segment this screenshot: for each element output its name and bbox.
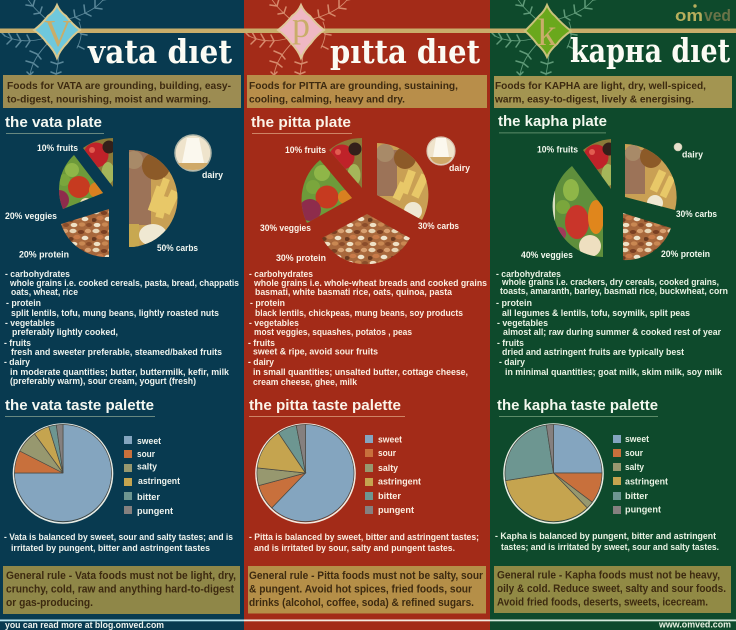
food list: kapha: toasts, amaranth, barley, basmati rice, buckwheat, corn	[500, 286, 728, 296]
legend: kapha tastes: pungent	[625, 504, 661, 514]
labels: pitta plate	[260, 145, 470, 263]
note: kapha balance	[495, 531, 719, 552]
banner: pitta foods intro	[247, 75, 487, 108]
pie: vata plate veggies	[59, 155, 103, 209]
legend: kapha tastes: bitter	[625, 491, 649, 501]
labels: pitta plate: 30% carbs	[418, 221, 459, 231]
food list: vata: - carbohydrates	[5, 269, 70, 279]
legend: pitta tastes: sour	[378, 448, 397, 458]
pie: kapha plate carbs	[625, 142, 679, 212]
panel: vata diet	[0, 0, 244, 630]
food list: kapha: - protein	[496, 298, 532, 308]
legend: kapha tastes: astringent	[625, 476, 668, 486]
pie chart: vata tastes	[14, 424, 112, 523]
footer: website: www.omved.com	[658, 620, 731, 630]
food list: pitta	[248, 269, 487, 387]
labels: pitta plate: dairy	[449, 163, 470, 173]
note: pitta balance: and is irritated by sour, salty and pungent tastes.	[254, 543, 455, 553]
labels: kapha plate: 20% protein	[661, 249, 710, 259]
banner: pitta foods intro: Foods for PITTA are grounding, sustaining,	[249, 80, 458, 92]
labels: vata plate: dairy	[202, 170, 223, 180]
banner: vata foods intro: Foods for VATA are grounding, building, easy-	[7, 80, 231, 92]
labels: vata plate	[5, 143, 223, 260]
food list: pitta: - protein	[250, 298, 285, 308]
pie: vata plate protein	[61, 209, 109, 257]
food list: pitta: basmati, white basmati rice, oats, quinoa, pasta	[255, 287, 452, 297]
pie: vata plate fruits	[83, 138, 113, 187]
food list: pitta: cream cheese, ghee, milk	[253, 377, 357, 387]
pie: pitta plate carbs	[377, 143, 428, 220]
legend: vata tastes: pungent	[137, 506, 173, 516]
food list: vata: - dairy	[4, 357, 30, 367]
labels: vata plate: 10% fruits	[37, 143, 78, 153]
labels: kapha plate: 10% fruits	[537, 144, 578, 154]
note: pitta balance: - Pitta is balanced by sweet, bitter and astringent tastes;	[249, 532, 479, 542]
callout: pitta general rule: & pungent. Avoid hot spices, fried foods, sour	[249, 584, 473, 596]
legend: vata tastes: sour	[137, 449, 156, 459]
pie chart: kapha tastes	[504, 424, 603, 523]
legend: kapha tastes: sweet	[625, 434, 649, 444]
pie: vata plate carbs	[129, 150, 178, 247]
pie: pitta plate protein	[322, 214, 410, 264]
banner: vata foods intro: to-digest, nourishing, moist and warming.	[7, 94, 211, 106]
food list: kapha: almost all; raw during summer & cooked rest of year	[503, 327, 722, 337]
legend: kapha tastes: salty	[625, 462, 644, 472]
legend: vata tastes: bitter	[137, 492, 161, 502]
legend: pitta tastes: salty	[378, 463, 398, 473]
food list: vata: preferably lightly cooked,	[12, 327, 118, 337]
ornament: vata branches	[2, 0, 108, 75]
note: vata balance: irritated by pungent, bitter and astringent tastes	[11, 543, 210, 553]
food list: kapha: - vegetables	[497, 318, 548, 328]
icon: pitta dairy	[427, 137, 455, 165]
legend: pitta tastes: sweet	[378, 434, 402, 444]
heading: the vata plate: the vata plate	[5, 115, 102, 131]
food list: kapha: - fruits	[497, 338, 524, 348]
labels: pitta plate: 10% fruits	[285, 145, 326, 155]
legend: pitta tastes: astringent	[378, 476, 421, 486]
food list: pitta: black lentils, chickpeas, mung beans, soy products	[255, 308, 463, 318]
food list: vata: (preferably warm), sour cream, yogurt (fresh)	[10, 376, 196, 386]
ornament: kapha branches	[492, 0, 598, 75]
food list: pitta: whole grains i.e. whole-wheat breads and cooked grains	[253, 278, 487, 288]
labels: vata plate: 50% carbs	[157, 243, 198, 253]
banner: kapha foods intro	[494, 76, 732, 108]
food list: pitta: sweet & ripe, avoid sour fruits	[253, 346, 378, 356]
icon: kapha dairy	[674, 143, 682, 151]
note: kapha balance: tastes; and is irritated by sweet, sour and salty tastes.	[501, 542, 719, 552]
heading: the pitta plate: the pitta plate	[251, 115, 351, 131]
food list: vata	[4, 269, 239, 386]
title: pitta diet: pıtta dıet	[330, 32, 481, 71]
callout: kapha general rule	[494, 566, 731, 613]
legend: kapha tastes: sour	[625, 448, 644, 458]
callout: pitta general rule	[248, 566, 486, 614]
pie: pitta plate fruits	[329, 138, 362, 188]
food list: pitta: - carbohydrates	[249, 269, 313, 279]
food list: vata: in moderate quantities; butter, buttermilk, kefir, milk	[10, 367, 229, 377]
labels: pitta plate: 30% veggies	[260, 223, 311, 233]
legend: vata tastes: astringent	[138, 476, 180, 486]
pie: kapha plate veggies	[552, 166, 603, 257]
food list: pitta: - dairy	[248, 357, 274, 367]
title: vata diet: vata dıet	[87, 32, 233, 71]
food list: vata: whole grains i.e. cooked cereals, pasta, bread, chappatis	[9, 278, 239, 288]
labels: vata plate: 20% veggies	[5, 211, 57, 221]
food list: kapha: - carbohydrates	[496, 269, 561, 279]
banner: vata foods intro	[3, 75, 241, 108]
callout: pitta general rule: General rule - Pitta foods must not be salty, sour	[249, 570, 484, 582]
emblem: V diamond	[34, 5, 80, 58]
labels: kapha plate: dairy	[682, 150, 703, 160]
food list: vata: - protein	[6, 298, 41, 308]
banner: kapha foods intro: warm, easy-to-digest, lively & energising.	[494, 94, 694, 106]
food list: kapha	[496, 269, 728, 377]
pie: pitta plate veggies	[302, 160, 352, 223]
legend: kapha tastes	[613, 434, 668, 514]
legend: pitta tastes: bitter	[378, 491, 402, 501]
callout: vata general rule: General rule - Vata foods must not be light, dry,	[6, 570, 236, 582]
logo: omved: ved	[704, 6, 731, 25]
food list: kapha: in minimal quantities; goat milk, skim milk, soy milk	[505, 367, 722, 377]
note: vata balance: - Vata is balanced by sweet, sour and salty tastes; and is	[4, 532, 233, 542]
food list: vata: - fruits	[4, 338, 31, 348]
food list: vata: - vegetables	[5, 318, 55, 328]
callout: kapha general rule: General rule - Kapha foods must not be heavy,	[497, 570, 720, 582]
emblem: P diamond: p	[292, 5, 310, 45]
pie chart: pitta tastes	[256, 424, 355, 523]
footer: blog link: you can read more at blog.omved.com	[5, 620, 164, 630]
logo: omved	[675, 4, 731, 25]
callout: kapha general rule: Avoid fried foods, deserts, sweets, icecream.	[497, 596, 708, 608]
emblem: K diamond: k	[538, 12, 556, 54]
logo: omved: om	[675, 6, 703, 25]
legend: vata tastes: sweet	[137, 436, 161, 446]
callout: vata general rule: crunchy, cold, raw and anything hard-to-digest	[6, 584, 234, 596]
emblem: K diamond	[525, 5, 571, 57]
emblem: P diamond	[278, 5, 324, 58]
food list: kapha: whole grains i.e. crackers, dry cereals, cooked grains,	[501, 277, 719, 287]
callout: vata general rule	[3, 566, 240, 614]
banner: kapha foods intro: Foods for KAPHA are light, dry, well-spiced,	[495, 80, 706, 92]
ornament: pitta branches	[246, 0, 352, 75]
legend: pitta tastes: pungent	[378, 505, 414, 515]
pie: kapha plate fruits	[583, 139, 611, 189]
gold band	[0, 28, 736, 33]
labels: kapha plate	[521, 144, 717, 260]
heading: the kapha taste palette: the kapha taste palette	[497, 398, 658, 414]
icon: vata dairy	[175, 135, 211, 171]
panel: kapha diet	[490, 0, 736, 630]
panel: pitta diet	[244, 0, 490, 630]
legend: vata tastes: salty	[137, 462, 157, 472]
food list: vata: oats, wheat, rice	[11, 287, 78, 297]
legend: pitta tastes	[365, 434, 421, 515]
note: kapha balance: - Kapha is balanced by pungent, bitter and astringent	[495, 531, 716, 541]
pie: kapha plate protein	[623, 213, 671, 260]
food list: pitta: - fruits	[248, 338, 275, 348]
heading: the vata taste palette: the vata taste palette	[5, 398, 154, 414]
banner: pitta foods intro: cooling, calming, heavy and dry.	[249, 94, 405, 106]
legend: vata tastes	[124, 436, 180, 516]
food list: vata: split lentils, tofu, mung beans, lightly roasted nuts	[11, 308, 219, 318]
food list: pitta: - vegetables	[249, 318, 299, 328]
callout: pitta general rule: drinks (alcohol, coffee, soda) & refined sugars.	[249, 597, 474, 609]
emblem: V diamond: V	[44, 13, 72, 55]
heading: the kapha plate: the kapha plate	[498, 114, 607, 130]
labels: kapha plate: 40% veggies	[521, 250, 573, 260]
labels: vata plate: 20% protein	[19, 250, 69, 260]
callout: vata general rule: or gas-producing.	[6, 597, 93, 609]
food list: vata: fresh and sweeter preferable, steamed/baked fruits	[11, 347, 222, 357]
food list: pitta: in small quantities; unsalted butter, cottage cheese,	[253, 367, 468, 377]
food list: kapha: all legumes & lentils, tofu, soymilk, split peas	[502, 308, 690, 318]
food list: pitta: most veggies, squashes, potatos , peas	[254, 327, 412, 337]
note: vata balance	[4, 532, 233, 553]
heading: the pitta taste palette: the pitta taste palette	[249, 398, 401, 414]
note: pitta balance	[249, 532, 479, 553]
food list: kapha: dried and astringent fruits are typically best	[502, 347, 684, 357]
labels: kapha plate: 30% carbs	[676, 209, 717, 219]
labels: pitta plate: 30% protein	[276, 253, 326, 263]
food list: kapha: - dairy	[499, 357, 525, 367]
